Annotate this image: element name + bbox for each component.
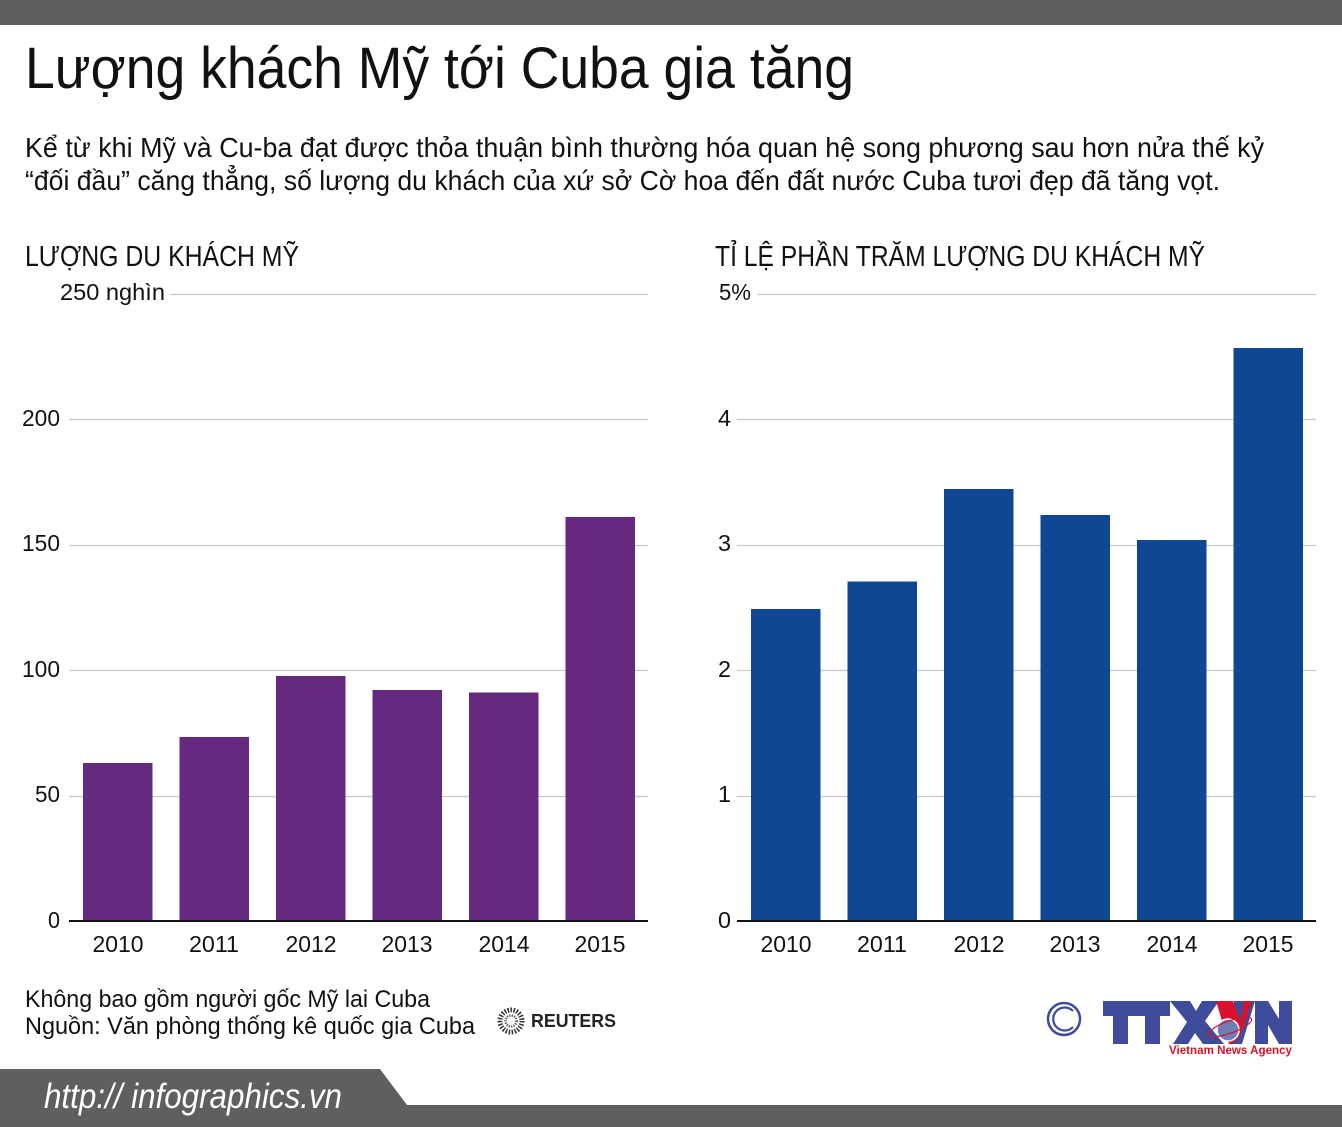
panel: share chart [715, 239, 1316, 957]
title: Lượng khách Mỹ tới Cuba gia tăng [25, 36, 854, 101]
bars: share per year [751, 348, 1303, 921]
x axis labels: 2015 [574, 931, 626, 957]
heading: share: TỈ LỆ PHẦN TRĂM LƯỢNG DU KHÁCH MỸ [715, 239, 1205, 273]
y axis labels [22, 279, 165, 933]
heading: visitors: LƯỢNG DU KHÁCH MỸ [25, 239, 299, 273]
y axis labels: 0 [48, 907, 60, 933]
y axis labels: 200 [22, 405, 60, 431]
x axis labels: 2014 [1146, 931, 1198, 957]
logo globe [1217, 1019, 1239, 1041]
logo letters T T X N [1103, 1001, 1292, 1044]
x axis labels: 2011 [189, 931, 239, 957]
y axis labels: 0 [718, 907, 731, 933]
y axis labels [718, 279, 751, 933]
source notes: Nguồn: Văn phòng thống kê quốc gia Cuba [25, 1013, 476, 1040]
source notes [25, 986, 476, 1040]
x axis line [69, 920, 648, 922]
x axis labels: 2013 [382, 931, 432, 957]
y axis gridlines [737, 294, 1316, 796]
logo orbit [1206, 1013, 1254, 1041]
y axis gridlines [69, 294, 648, 796]
y axis labels: 150 [22, 530, 60, 556]
intro text: “đối đầu” căng thẳng, số lượng du khách của xứ sở Cờ hoa đến đất nước Cuba tươi đẹp đã tăng vọt. [25, 164, 1220, 196]
y axis labels: 3 [718, 530, 731, 556]
x axis labels: 2010 [760, 931, 812, 957]
icon: reuters logo [500, 1010, 616, 1032]
intro text [25, 132, 1264, 196]
x axis labels [760, 931, 1294, 957]
icon: copyright [1048, 1003, 1080, 1035]
logo V blue shadow [1230, 1001, 1255, 1044]
top bar [0, 0, 1342, 25]
source notes: Không bao gồm người gốc Mỹ lai Cuba [25, 986, 431, 1013]
x axis labels: 2014 [478, 931, 530, 957]
x axis labels: 2012 [286, 931, 336, 957]
x axis labels: 2011 [857, 931, 907, 957]
y axis labels: 1 [718, 781, 731, 807]
url: http:// infographics.vn [44, 1077, 342, 1116]
logo: TTXVN [1103, 1001, 1293, 1057]
x axis labels: 2015 [1242, 931, 1294, 957]
x axis labels: 2010 [92, 931, 144, 957]
y axis labels: 4 [718, 405, 731, 431]
logo V red [1216, 1001, 1252, 1044]
y axis labels: 100 [22, 656, 60, 682]
y axis labels: 2 [718, 656, 731, 682]
x axis labels [92, 931, 626, 957]
bars: visitors per year [83, 517, 635, 921]
logo tagline: Vietnam News Agency [1169, 1045, 1293, 1057]
x axis labels: 2012 [954, 931, 1004, 957]
x axis line [737, 920, 1316, 922]
intro text: Kể từ khi Mỹ và Cu-ba đạt được thỏa thuận bình thường hóa quan hệ song phương sau hơn nửa thế kỷ [25, 132, 1264, 163]
icon: reuters logo: REUTERS [531, 1011, 616, 1031]
panel: visitors chart [22, 239, 648, 957]
footer bar with url tab [0, 1069, 1342, 1127]
x axis labels: 2013 [1050, 931, 1100, 957]
y axis labels: 50 [35, 781, 60, 807]
y axis labels: 250 nghìn [60, 279, 165, 305]
y axis labels: 5% [719, 279, 751, 305]
